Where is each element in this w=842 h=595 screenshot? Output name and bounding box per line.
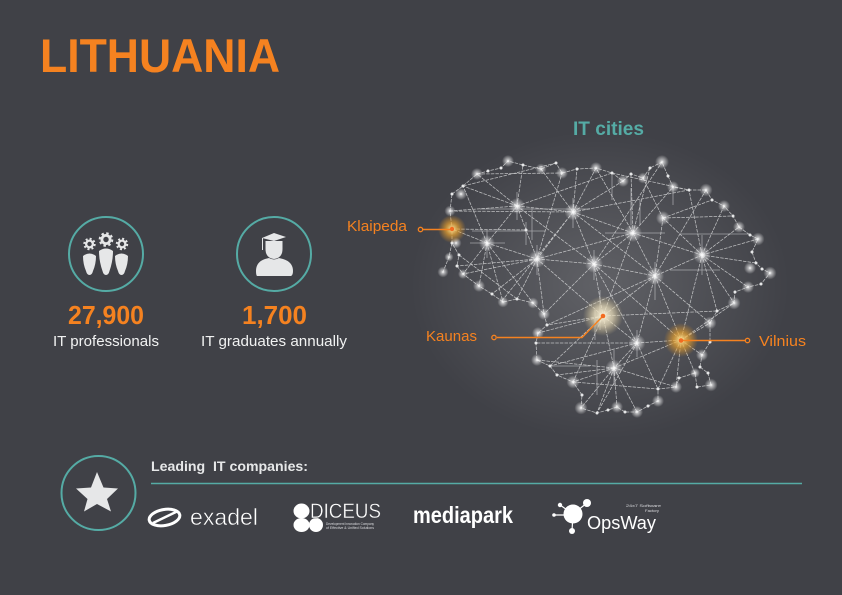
stat: IT professionals <box>53 217 159 350</box>
logo: opsway: OpsWay <box>587 513 656 533</box>
label: IT professionals: IT professionals <box>53 333 159 350</box>
logo: diceus: of Effective & Unified Solutions <box>326 526 374 530</box>
logo: opsway <box>552 499 662 534</box>
city: Vilnius <box>664 323 806 357</box>
network lines <box>443 161 770 413</box>
city: Kaunas: Kaunas <box>426 328 477 345</box>
heading: IT cities: IT cities <box>573 119 644 140</box>
number: 27,900: 27,900 <box>68 300 144 330</box>
icon: star <box>62 456 136 530</box>
small nodes <box>450 162 764 414</box>
icon: professionals with gears <box>69 217 143 291</box>
label: IT graduates annually: IT graduates annually <box>201 333 347 350</box>
logo: mediapark: mediapark <box>413 502 513 528</box>
logo: exadel <box>148 504 258 530</box>
logo: diceus <box>294 500 381 532</box>
glowing nodes <box>438 155 776 418</box>
logo: diceus: Development Innovation Company <box>326 522 374 526</box>
city: Kaunas <box>426 296 623 345</box>
logo: opsway: Factory <box>645 508 659 513</box>
logo: opsway: 24x7 Software <box>626 503 662 508</box>
title: LITHUANIA <box>40 29 280 82</box>
sparkle flares <box>470 173 750 395</box>
stat: IT graduates <box>201 217 347 350</box>
heading: leading IT companies: Leading IT companies: <box>151 458 308 474</box>
city: Vilnius: Vilnius <box>759 333 806 350</box>
logo: diceus: DICEUS <box>310 500 381 523</box>
city: Klaipeda <box>347 215 466 243</box>
logo: exadel: exadel <box>190 504 258 530</box>
city: Klaipeda: Klaipeda <box>347 218 408 235</box>
icon: graduate <box>237 217 311 291</box>
map: Lithuania network <box>410 130 790 440</box>
number: 1,700: 1,700 <box>242 300 307 330</box>
